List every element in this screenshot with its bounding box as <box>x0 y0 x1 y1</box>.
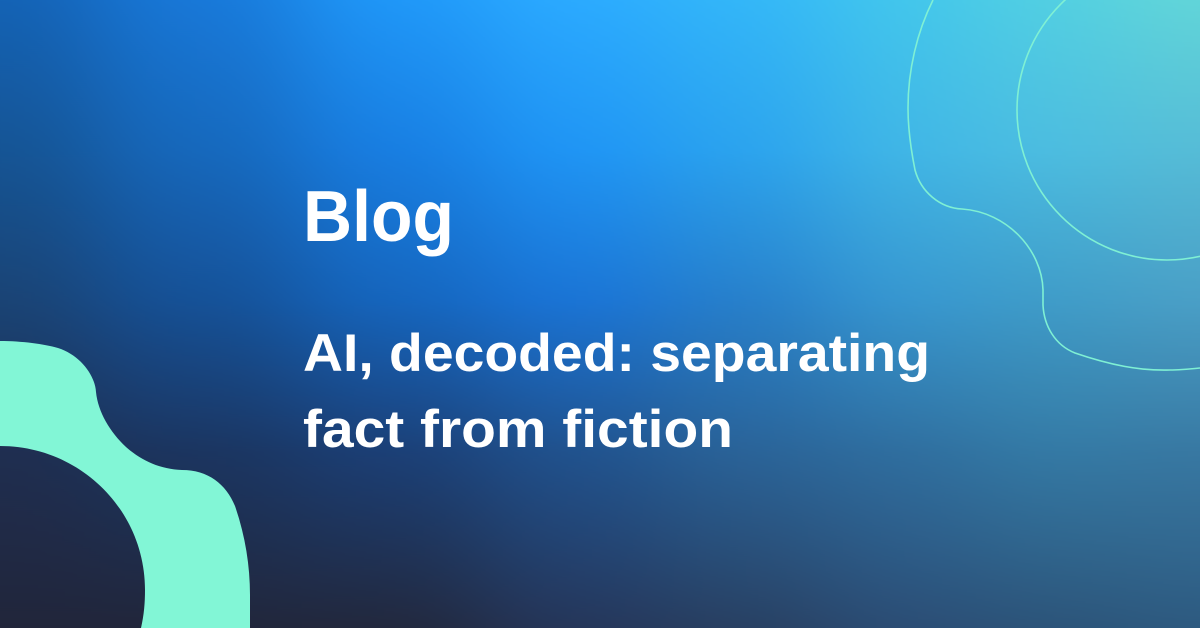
heading: article title <box>303 324 930 459</box>
outline gear contour, top right <box>908 0 1200 370</box>
outline inner circle, top right <box>1017 0 1200 260</box>
heading: article title: fact from fiction <box>303 400 733 459</box>
label: Blog: Blog <box>303 177 454 257</box>
heading: article title: AI, decoded: separating <box>303 324 930 383</box>
decorative mint gear shape, bottom left <box>0 341 250 628</box>
